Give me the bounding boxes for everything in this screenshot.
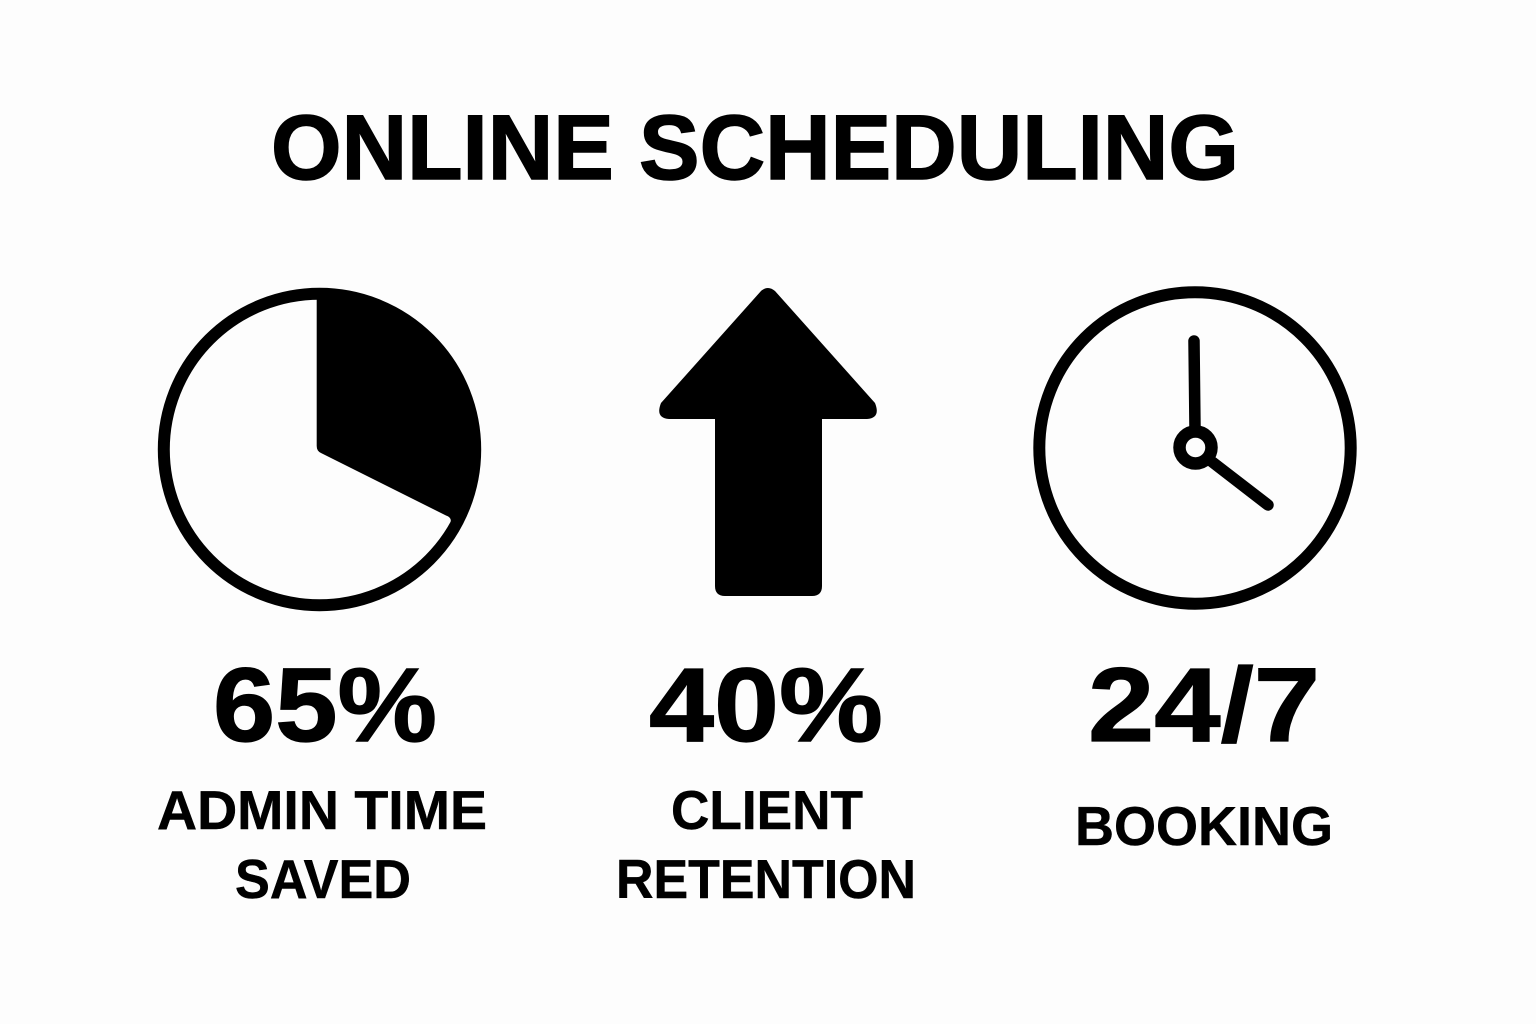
stat: 40% client retention: CLIENT	[671, 779, 863, 841]
stat: 24/7 booking	[1075, 647, 1333, 857]
stat: 65% admin time saved: SAVED	[235, 848, 411, 910]
icon: up arrow	[659, 288, 877, 596]
icon: pie chart	[164, 293, 475, 605]
icon: clock	[1039, 292, 1351, 604]
stat: 65% admin time saved	[157, 647, 487, 910]
stat: 40% client retention: RETENTION	[616, 848, 916, 910]
stat: 24/7 booking: BOOKING	[1075, 795, 1333, 857]
stat: 40% client retention: 40%	[649, 647, 883, 764]
stat: 24/7 booking: 24/7	[1088, 647, 1320, 764]
stat: 65% admin time saved: ADMIN TIME	[157, 779, 487, 841]
title: ONLINE SCHEDULING	[271, 97, 1239, 199]
stat: 65% admin time saved: 65%	[213, 647, 437, 764]
stat: 40% client retention	[616, 647, 916, 910]
